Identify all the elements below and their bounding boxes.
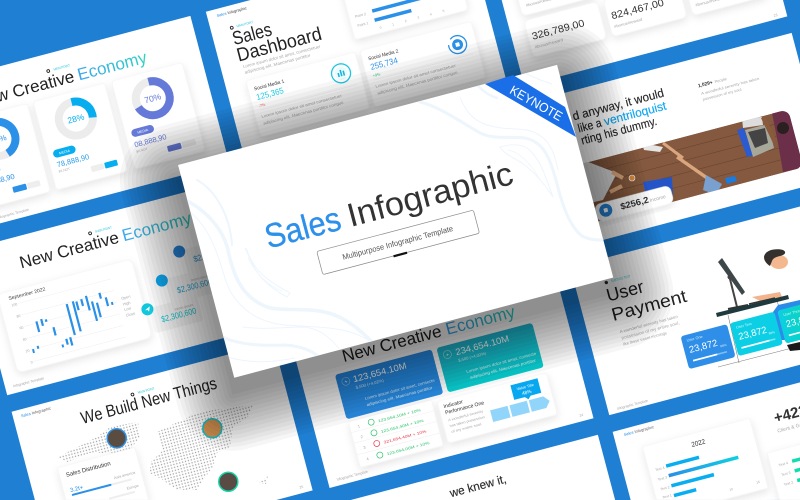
card: blue donut (0, 103, 51, 210)
chart legend: High (122, 301, 131, 307)
chart card 2022: 15 (756, 480, 761, 485)
card: social media 2: +9% (372, 72, 381, 78)
heading: user payment (604, 266, 689, 325)
chart card 2022: Text 1 (662, 493, 672, 500)
ranking table: 3 (363, 444, 367, 450)
heading: sales dashboard (230, 7, 324, 66)
slide: user payment: A wonderful serenity has taken (619, 314, 679, 334)
value callout: 48% (521, 389, 533, 397)
chart card: 20 (25, 349, 30, 354)
slide: economy with indicator cards (291, 271, 594, 488)
green bar card: Text 4 (778, 461, 789, 467)
indicator performance card: of my entire soul. (451, 422, 483, 434)
chart legend (121, 294, 136, 318)
illustration: person at desk (716, 249, 800, 367)
value callout: Value Title (516, 383, 534, 391)
slide title (340, 302, 518, 366)
indicator performance card: A wonderful serenity (448, 409, 484, 422)
card: user two: 23,872 (737, 325, 768, 343)
chart card 2022: Text 2 (660, 485, 670, 491)
slide: user payment: SUBTITLE TEXT (611, 274, 631, 283)
slide: donut charts: MAIN POINT (53, 63, 71, 72)
card: social media 1: Social Media 1 (254, 79, 285, 92)
sales distribution card: Sales Distribution (65, 461, 111, 479)
upper stat cards (513, 0, 596, 16)
slide: sales dashboard: adipiscing elit. Maecenas porttitor (244, 52, 312, 75)
horizontal bars (666, 446, 744, 497)
card: cyan donut: 28% (66, 111, 86, 126)
card: social media 1 (246, 52, 370, 137)
card: social media 1: adipiscing elit. Maecenas porttitor congue (263, 100, 345, 126)
stat item three: $2,300,600 (160, 305, 198, 324)
heading: user payment: Payment (609, 286, 689, 325)
card: cyan donut: $X,NOT (58, 167, 70, 174)
stat item three: lorem ipsum (174, 303, 194, 312)
chart card 2022 (642, 418, 768, 500)
chart legend: Open (121, 295, 131, 301)
card: user two (730, 312, 783, 356)
slide: economy with indicator cards: Infographic Template (336, 470, 368, 482)
sales distribution card (57, 447, 149, 500)
blue metric card: adipiscing elit. Maecenas porttitor (366, 385, 434, 407)
sales distribution card: Asia america (113, 470, 137, 480)
stat card 824,467: #bonus#reward (614, 17, 643, 29)
title: sales infographic (261, 155, 517, 256)
title: sales infographic: Sales (261, 200, 345, 256)
chart legend: Low (124, 306, 132, 312)
people stat: 1,029+ (697, 80, 714, 89)
avatar markers (107, 419, 238, 491)
bar chart card: 0 (379, 25, 382, 30)
bar chart card: 4 (429, 12, 432, 17)
slide: bonus reward cards (485, 0, 787, 86)
slide: we build new things: 25 (299, 485, 304, 490)
slide: economy with indicator cards: 24 (579, 413, 584, 418)
keynote ribbon (485, 75, 576, 137)
quote text (571, 86, 672, 148)
green bar card: Text 3 (781, 471, 791, 477)
ranking table: 123,654,10M + 10% (378, 408, 422, 423)
card: user two: 88% (768, 330, 776, 336)
stat item one (172, 230, 245, 277)
chart card: 40 (22, 337, 27, 342)
card: user one: 88% (720, 343, 727, 348)
quote text: d anyway, it would (571, 86, 665, 123)
stat item two: $2,300,600 (176, 276, 213, 295)
slide: sales dashboard: Sales Infographic (216, 5, 247, 18)
contour line decoration (187, 73, 604, 362)
stat item one: $2,300,600 (192, 245, 230, 264)
chart card: 80 (16, 314, 21, 319)
bar chart card: 5 (442, 9, 445, 13)
bar chart card: Point 1 (357, 21, 369, 28)
slide title: New Creative (17, 228, 121, 272)
people stat: possession of my soul (702, 88, 742, 102)
chart legend: Close (125, 311, 136, 318)
bar chart card: Point 2 (355, 12, 366, 19)
slide: candlestick chart: MAIN POINT (95, 226, 112, 234)
icon: chart ring (329, 62, 353, 85)
blue metric card: $,500 (+4,02%) (355, 378, 385, 390)
subtitle box: Multipurpose Infographic Template (341, 224, 455, 262)
slide: we knew it: we knew it, (447, 472, 508, 500)
stat card 326,789: 326,789,00 (531, 18, 586, 43)
teal metric card: Lorem ipsum dolor sit amet, consecte (466, 351, 537, 374)
card: social media 1: Lorem ipsum dolor sit amet consectetuer (261, 93, 343, 119)
teal metric card (436, 323, 544, 393)
quote text: ventriloquist (602, 98, 668, 128)
slide title (0, 48, 149, 111)
chart card 2022: Text 4 (655, 466, 665, 472)
blue metric card (335, 349, 443, 419)
blue metric card: + (344, 379, 348, 386)
photo: handshake at table (583, 111, 800, 222)
ranking table (348, 400, 444, 467)
indicator performance card: Performance One (445, 400, 485, 416)
slide title: Economy (444, 302, 518, 339)
stat card 824,467 (603, 0, 687, 37)
card: cyan donut: MEDIA (59, 149, 71, 155)
card: violet donut (111, 63, 205, 169)
heading: sales dashboard: Sales (230, 19, 274, 50)
slide: we build new things: Sales Infographic (20, 406, 51, 418)
green bar card (767, 425, 800, 500)
chart card (0, 259, 152, 373)
heading: user payment: User (604, 276, 646, 306)
indicator performance card (437, 373, 557, 443)
slide: 2022 bar chart (613, 358, 800, 500)
slide: candlestick chart (0, 180, 270, 395)
card: violet donut: $X,NOT (136, 147, 148, 154)
slide: ventriloquist quote and photo (564, 32, 800, 240)
slide: candlestick chart: Infographic Template (13, 376, 45, 388)
slide title: Economy (120, 209, 194, 245)
card: social media 2: Social Media 2 (368, 48, 399, 62)
teal metric card: $,500 (+4,02%) (458, 350, 487, 363)
slide: donut charts (0, 16, 229, 232)
card: violet donut: 08,888,90 (133, 132, 168, 149)
ranking table: 2 (360, 434, 364, 439)
bar chart card: 2 (404, 19, 407, 23)
people stat (697, 68, 761, 102)
slide: we build new things (12, 342, 313, 500)
indicator performance card: Indicator (443, 399, 464, 410)
chart card: 0 (30, 360, 33, 365)
green bar card: Text 2 (783, 480, 794, 487)
income pill: $256,2 (619, 195, 650, 212)
title: sales infographic: Infographic (343, 155, 517, 234)
slide title: Economy (75, 48, 149, 84)
chart card 2022: 10 (729, 487, 734, 492)
candlestick bars (22, 290, 121, 356)
heading: We Build New Things (79, 374, 219, 428)
slide: sales dashboard: Lorem ipsum dolor sit amet, consectetuer (242, 44, 322, 69)
card: social media 2 (360, 21, 486, 107)
card: user one: 23,872 (688, 338, 719, 356)
stat card 326,789 (524, 1, 607, 58)
card: user three (777, 298, 800, 344)
slide: 2022 bar chart: Sales Infographic (623, 424, 654, 437)
card: user one: User One (686, 335, 703, 343)
stat card 326,789: #bonus#reward (534, 37, 563, 49)
bar chart card (338, 0, 468, 40)
indicator performance card: has taken possession (449, 415, 485, 428)
chart card 2022: Text 3 (657, 476, 668, 482)
ranking table: 4 (366, 456, 370, 462)
teal metric card: + (445, 352, 450, 359)
stat card three (683, 0, 767, 16)
people stat: People (714, 76, 728, 84)
chart card 2022: 2022 (691, 439, 706, 449)
ranking table: 321,654,40M + 10% (383, 429, 428, 445)
chevron steps (490, 395, 551, 422)
dotted world map (58, 405, 268, 490)
stat item three (140, 290, 204, 335)
card: social media 2: Lorem ipsum dolor sit amet consectetuer (375, 63, 457, 89)
card: user one (680, 324, 736, 369)
slide: user payment (570, 185, 800, 417)
slide title: New Creative (340, 322, 444, 366)
card: cyan donut: 78,888,90 (56, 152, 90, 169)
quote text: like a (576, 116, 603, 135)
subtitle box (317, 210, 480, 276)
bar chart card: 3 (417, 16, 420, 20)
slide: user payment: like these sweet mornings (622, 330, 667, 347)
slide: we build new things: MAIN POINT (137, 387, 155, 395)
card: social media 2: 255,734 (369, 55, 399, 72)
chart card: 100 (11, 302, 18, 308)
sales distribution card: 3.2t+ (70, 485, 85, 494)
slide: we knew it (351, 435, 615, 500)
slide: user payment: possession of my entire soul, (621, 320, 680, 340)
card: social media 2: adipiscing elit. Maecenas porttitor congue (377, 69, 459, 96)
slide: sales dashboard (205, 0, 509, 159)
value callout (510, 378, 542, 403)
chart card: September 2022 (8, 287, 46, 302)
card: cyan donut (33, 83, 128, 190)
blue metric card: 123,654.10M (352, 360, 408, 384)
income pill: Income (649, 194, 667, 204)
bar chart card: 1 (392, 22, 395, 27)
slide: sales dashboard: MAIN POINT (236, 20, 254, 28)
blue metric card: Lorem ipsum dolor sit amet, consecte (364, 378, 436, 401)
teal metric card: 234,654.10M (454, 333, 510, 357)
slide title (17, 209, 194, 272)
main slide (178, 65, 614, 378)
card: violet donut: MEDIA (137, 128, 149, 135)
ranking table: 123,654,40M + 10% (380, 419, 425, 434)
slide: user payment: Infographic Template (616, 399, 648, 411)
chart card: 60 (19, 325, 24, 330)
heading: sales dashboard: Dashboard (235, 24, 324, 66)
ranking table: 1 (357, 423, 361, 429)
card: violet donut: 70% (143, 91, 163, 105)
slide: bonus reward cards: 23 (773, 13, 778, 18)
sales distribution card: Europe (126, 484, 139, 491)
quote text: rting his dummy. (579, 114, 658, 147)
teal metric card: adipiscing elit. Maecenas porttitor (469, 358, 537, 380)
card: social media 1: -7% (258, 103, 266, 108)
cast shadow of main slide (107, 10, 686, 463)
card: user two: User Two (736, 322, 752, 330)
card: social media 1: 125,365 (255, 85, 285, 102)
people stat: A wonderful serenity has taken (701, 77, 760, 96)
icon: blue ring (447, 34, 469, 56)
keynote ribbon: KEYNOTE (507, 82, 565, 124)
ranking table: 123,654,00M + 10% (386, 441, 431, 456)
stat item two (155, 260, 224, 307)
income pill (594, 185, 674, 222)
stat item two: lorem ipsum (190, 274, 210, 282)
